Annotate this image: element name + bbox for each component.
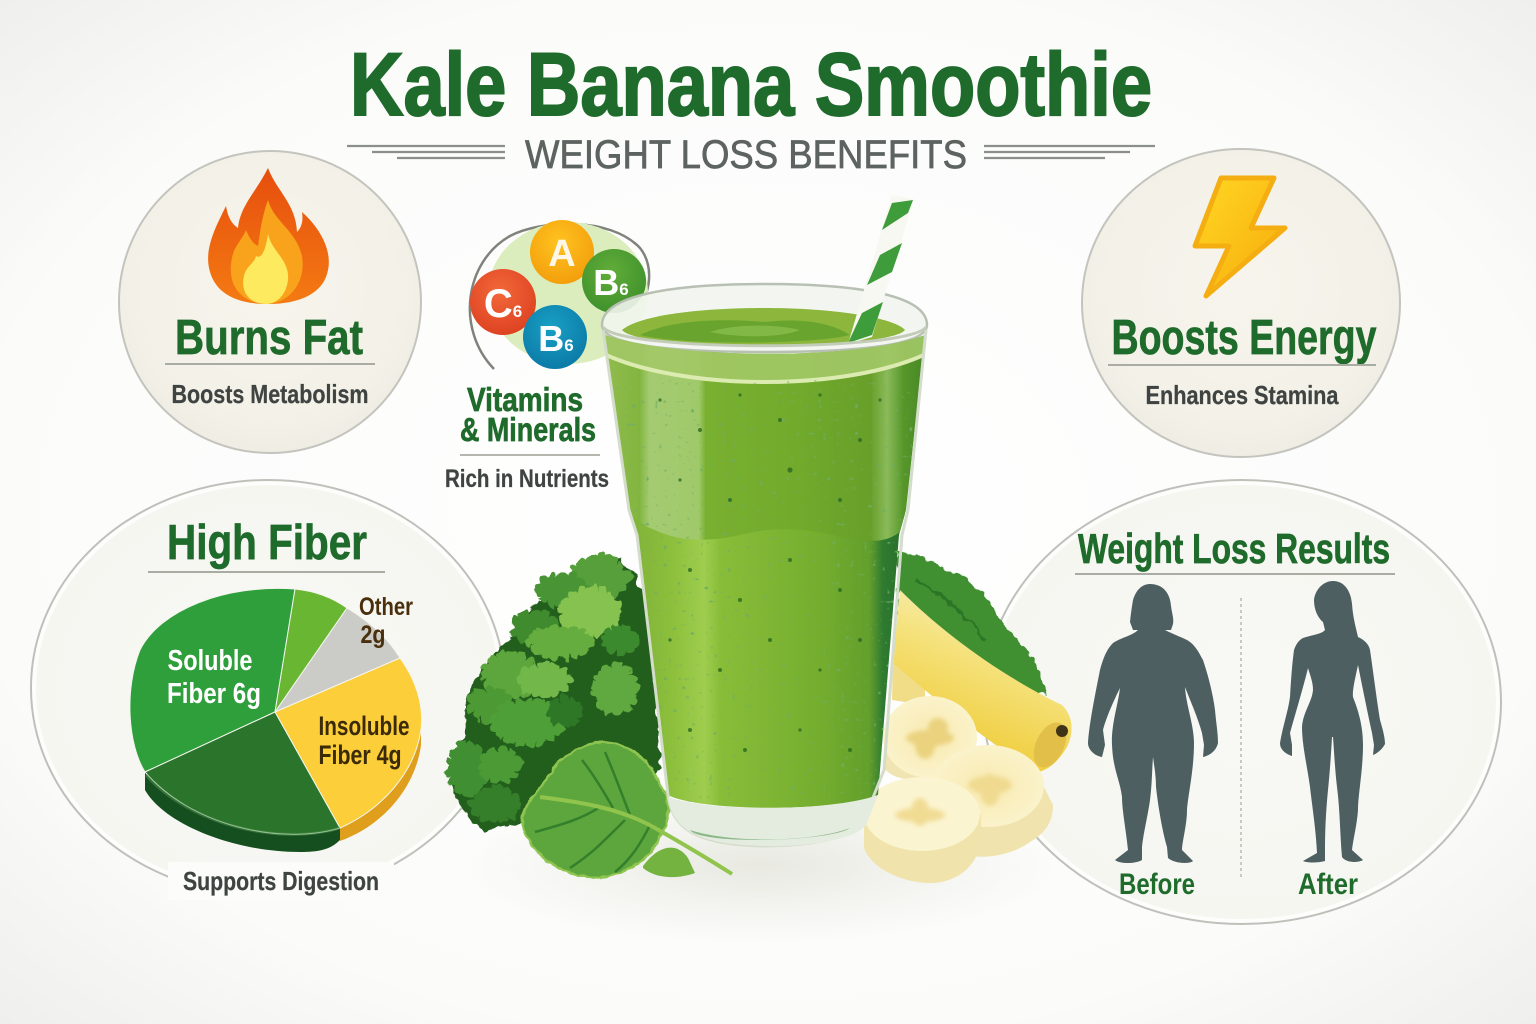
icon: vitamin balls: C6	[484, 282, 522, 326]
panel: burns fat	[119, 151, 421, 453]
subtitle with rules: WEIGHT LOSS BENEFITS	[525, 133, 967, 177]
icon: flame	[208, 168, 329, 304]
pie chart: Fiber 4g	[318, 740, 402, 770]
plate shadow	[460, 787, 1060, 943]
banana peeled	[892, 590, 1073, 773]
kale left	[450, 558, 732, 878]
icon: vitamin balls: B6	[593, 262, 629, 303]
smoothie body	[600, 330, 930, 820]
heading: boosts energy: Boosts Energy	[1112, 311, 1376, 365]
heading: vitamins and minerals: Vitamins	[467, 381, 583, 418]
title: Kale Banana Smoothie	[350, 34, 1152, 134]
label: after: After	[1298, 868, 1358, 901]
label: before: Before	[1119, 868, 1195, 901]
caption: supports digestion	[168, 862, 394, 900]
slice two	[932, 745, 1053, 857]
panel: vitamins and minerals: & Minerals	[460, 411, 596, 448]
slice three	[864, 777, 981, 883]
pie chart	[130, 588, 422, 852]
straw	[848, 195, 914, 344]
smoothie speckles	[658, 393, 882, 752]
panel: high fiber	[31, 480, 505, 900]
smoothie surface	[622, 308, 905, 346]
fine speckle texture	[600, 380, 930, 810]
heading: weight loss results: Weight Loss Results	[1078, 525, 1390, 572]
icon: vitamin balls	[470, 220, 649, 369]
pie chart: Fiber 6g	[167, 678, 261, 710]
glass back and rim	[602, 284, 927, 352]
kale back right	[896, 552, 1048, 695]
heading: burns fat: Burns Fat	[175, 311, 363, 365]
icon: after silhouette	[1280, 581, 1385, 862]
caption: enhances stamina: Enhances Stamina	[1146, 380, 1339, 410]
caption: boosts metabolism: Boosts Metabolism	[172, 379, 368, 409]
panel: boosts energy	[1082, 149, 1400, 457]
caption: supports digestion: Supports Digestion	[183, 866, 379, 896]
caption: rich in nutrients: Rich in Nutrients	[445, 465, 609, 493]
icon: vitamin balls: B6	[538, 318, 574, 359]
label: insoluble fiber: Insoluble	[318, 711, 410, 741]
glass walls and base	[603, 330, 926, 846]
panel: vitamins and minerals	[445, 220, 649, 493]
banana slices	[864, 696, 1053, 883]
glass with smoothie	[600, 195, 930, 846]
icon: before silhouette	[1088, 584, 1218, 863]
kale leaf	[522, 742, 732, 878]
label: other: Other	[359, 593, 413, 621]
panel: weight loss results	[983, 480, 1501, 924]
slice one	[883, 696, 977, 779]
icon: lightning bolt	[1195, 178, 1285, 296]
subtitle with rules	[347, 133, 1155, 177]
pie chart: 2g	[360, 621, 386, 649]
icon: vitamin balls: A	[548, 233, 576, 275]
label: soluble fiber: Soluble	[168, 645, 252, 677]
heading: high fiber: High Fiber	[167, 516, 367, 570]
